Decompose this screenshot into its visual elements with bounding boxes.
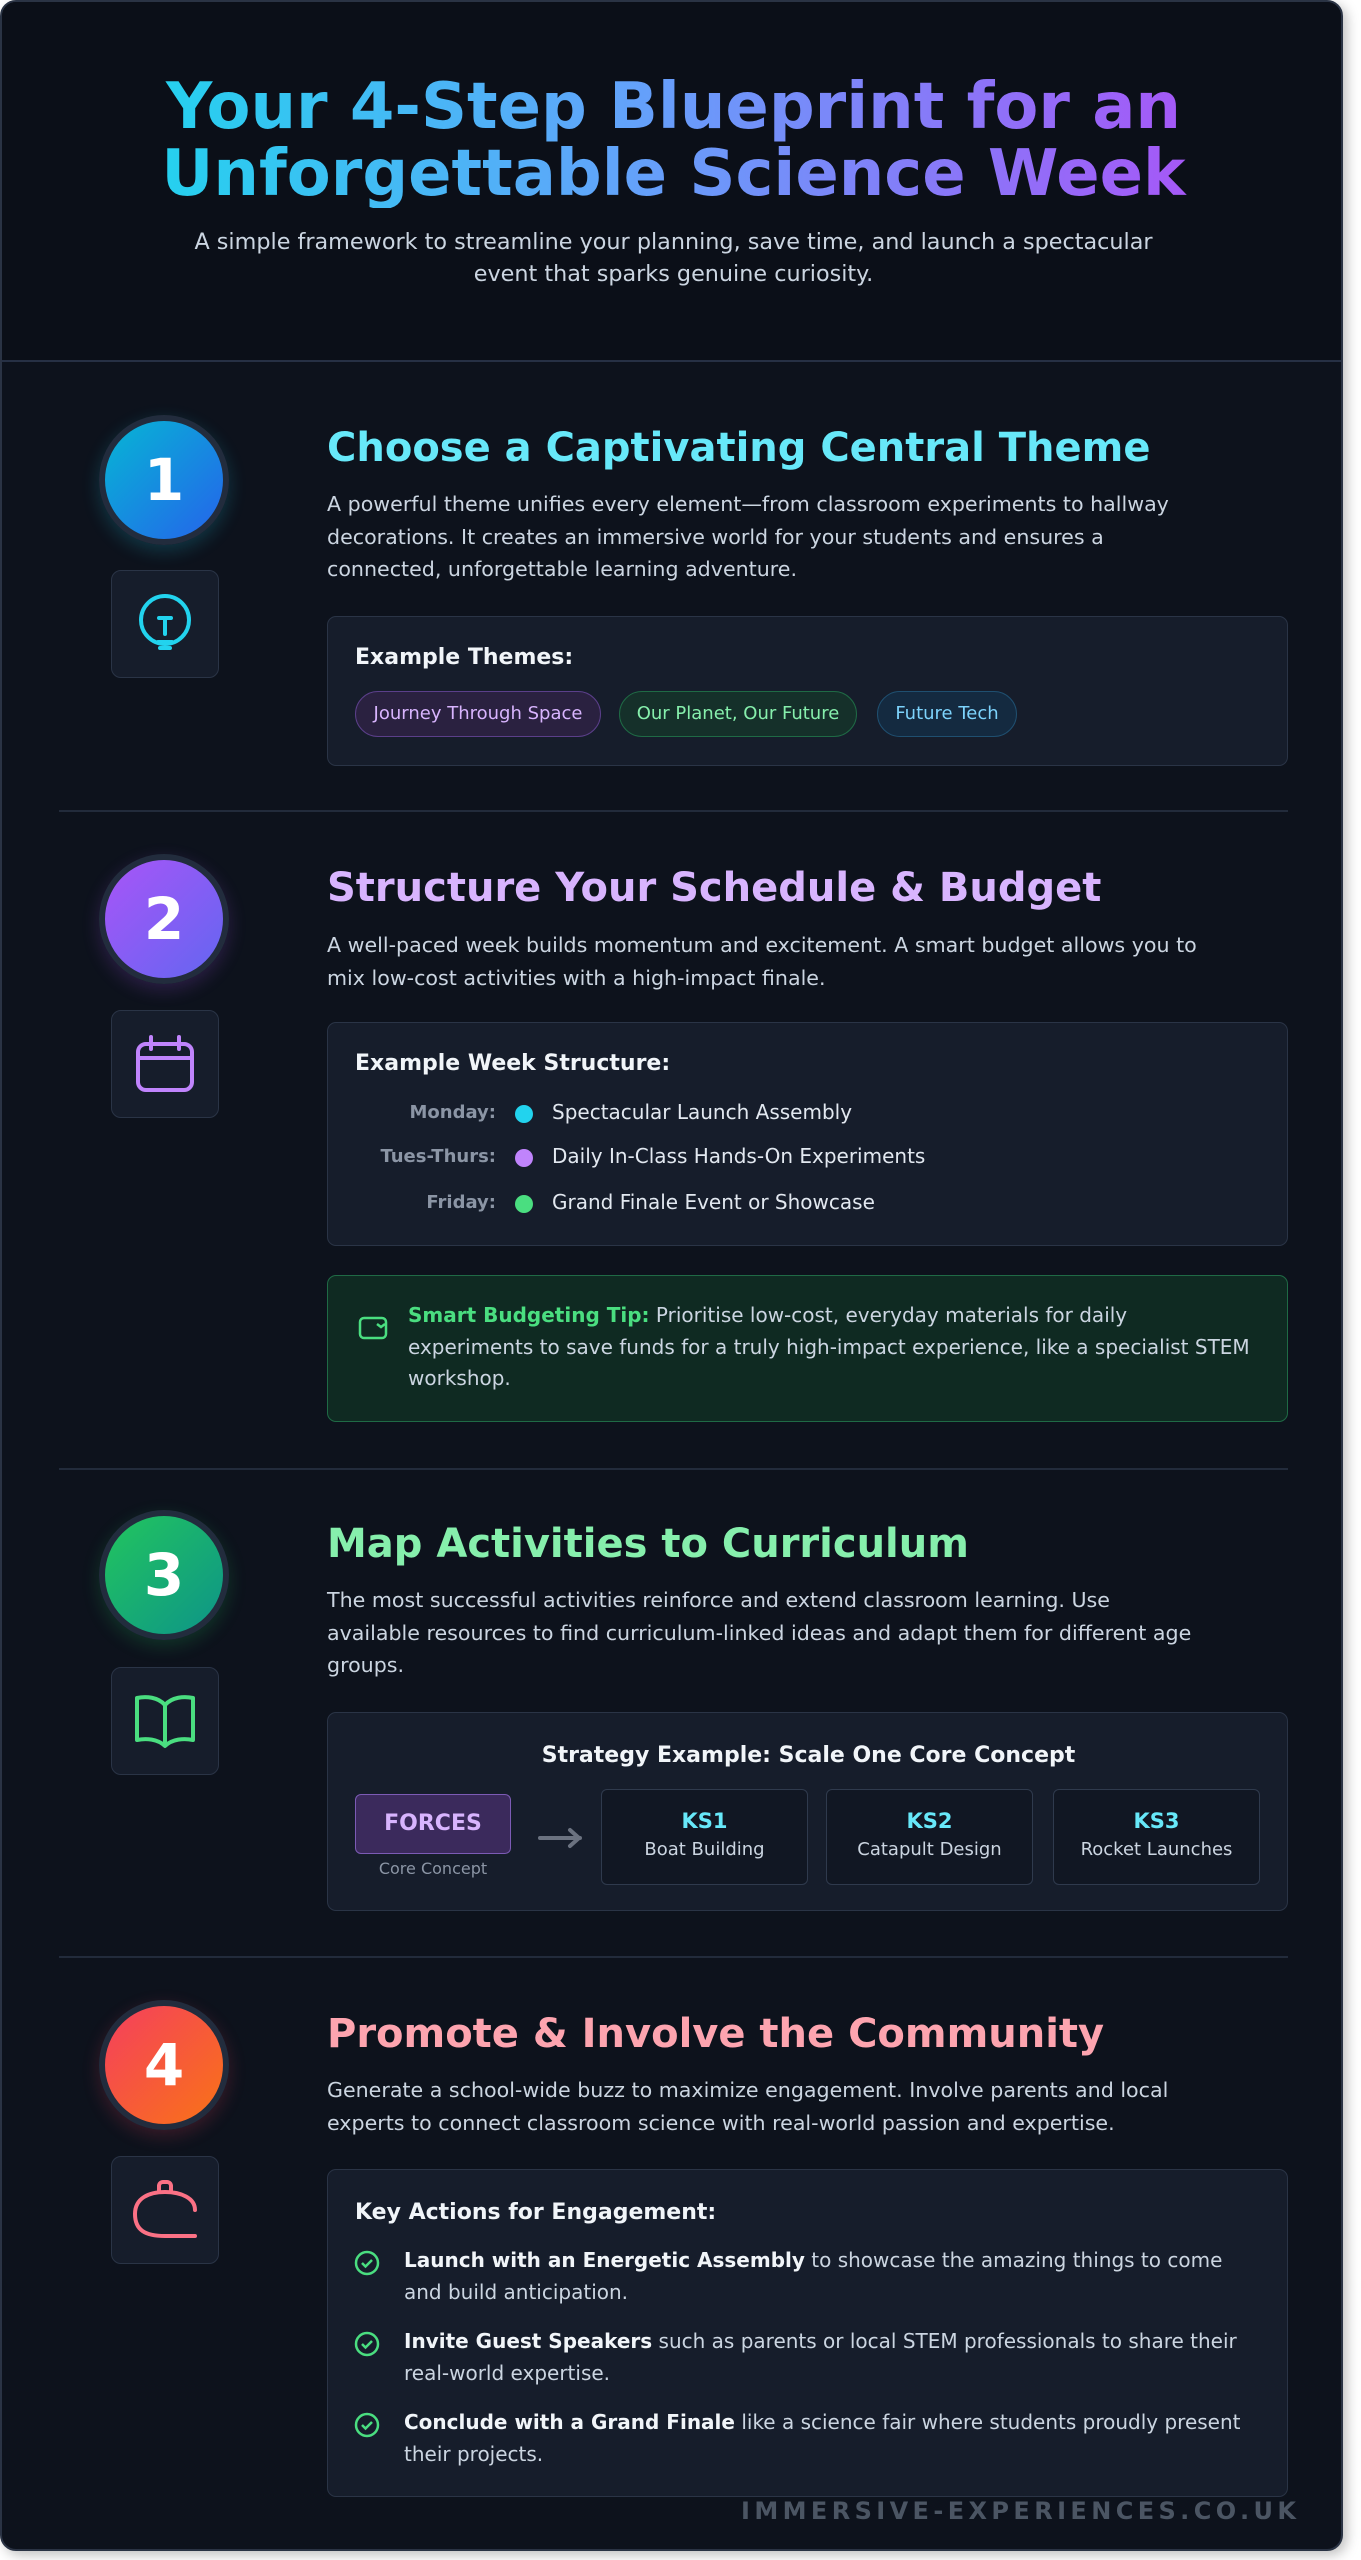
title (2, 74, 1345, 208)
KS2 (826, 1789, 1033, 1885)
step 1 number: 1 (144, 446, 184, 514)
heading 1: Choose a Captivating Central Theme (327, 425, 1150, 471)
icon: book (111, 1667, 219, 1775)
row tues-thurs: Tues-Thurs: (380, 1146, 496, 1167)
action 3: Conclude with a Grand Finale like a science fair where students proudly present their projects. (404, 2410, 1241, 2466)
row monday (409, 1100, 852, 1124)
core concept: forces (355, 1794, 511, 1854)
step 2 number: 2 (144, 885, 184, 953)
step 2 number (99, 854, 229, 984)
pill: space (355, 691, 601, 737)
text 2: A well-paced week builds momentum and excitement. A smart budget allows you to mix low-cost activities with a high-impact finale. (327, 933, 1197, 990)
KS2: Catapult Design (857, 1839, 1002, 1860)
icon: bag (111, 2156, 219, 2264)
KS2: KS2 (906, 1809, 952, 1833)
callout: budgeting tip: Smart Budgeting Tip: Prioritise low-cost, everyday materials for daily experiments to save funds for a truly high-impact experience, like a specialist STEM workshop. (408, 1303, 1250, 1390)
panel: example themes: Example Themes: (355, 645, 573, 670)
heading 4: Promote & Involve the Community (327, 2011, 1104, 2057)
heading 2: Structure Your Schedule & Budget (327, 865, 1101, 911)
step 4 number: 4 (144, 2031, 184, 2099)
row friday: Friday: (426, 1192, 496, 1213)
step 3 number (99, 1510, 229, 1640)
subtitle: A simple framework to streamline your planning, save time, and launch a spectacular (194, 229, 1153, 255)
panel: key actions: Key Actions for Engagement: (355, 2200, 716, 2225)
heading 3: Map Activities to Curriculum (327, 1521, 969, 1567)
icon: lightbulb (111, 570, 219, 678)
step 1 number (99, 415, 229, 545)
panel: example themes (327, 616, 1288, 766)
panel: strategy example: Strategy Example: Scale One Core Concept (542, 1743, 1075, 1768)
panel: strategy example (327, 1712, 1288, 1911)
title: Your 4-Step Blueprint for an (166, 70, 1181, 144)
icon: wallet (358, 1316, 388, 1340)
KS1: KS1 (681, 1809, 728, 1833)
panel: week structure (327, 1022, 1288, 1246)
pill: planet: Our Planet, Our Future (637, 703, 839, 724)
text 3 (326, 1588, 1191, 1677)
KS1 (601, 1789, 808, 1885)
row tues-thurs: Daily In-Class Hands-On Experiments (552, 1144, 925, 1168)
callout: budgeting tip (327, 1275, 1288, 1422)
panel: key actions (327, 2169, 1288, 2497)
panel: week structure: Example Week Structure: (355, 1051, 670, 1076)
subtitle: event that sparks genuine curiosity. (474, 261, 873, 287)
KS3 (1053, 1789, 1260, 1885)
row monday: Monday: (409, 1102, 496, 1123)
text 3: The most successful activities reinforce and extend classroom learning. Use (327, 1588, 1110, 1612)
core concept: forces: FORCES (384, 1811, 482, 1836)
KS3: Rocket Launches (1081, 1839, 1232, 1860)
text 3: available resources to find curriculum-linked ideas and adapt them for different age groups. (327, 1621, 1191, 1677)
text 1: A powerful theme unifies every element—from classroom experiments to hallway decorations. It creates an immersive world for your students and ensures a connected, unforgettable learning adventure. (327, 492, 1169, 581)
text 4: experts to connect classroom science with real-world passion and expertise. (327, 2111, 1115, 2135)
text 4 (327, 2078, 1168, 2135)
row monday: Spectacular Launch Assembly (552, 1100, 852, 1124)
pill: planet (619, 691, 857, 737)
pill: space: Journey Through Space (374, 703, 582, 724)
title: Unforgettable Science Week (161, 137, 1186, 211)
action 1: Launch with an Energetic Assembly to showcase the amazing things to come and build anticipation. (404, 2248, 1222, 2304)
KS3: KS3 (1133, 1809, 1180, 1833)
panel: strategy example: Core Concept (379, 1859, 487, 1878)
icon: calendar (111, 1010, 219, 1118)
step 4 number (99, 2000, 229, 2130)
KS1: Boat Building (644, 1839, 765, 1860)
pill: tech: Future Tech (895, 703, 999, 724)
step 3 number: 3 (144, 1541, 184, 1609)
footer: IMMERSIVE-EXPERIENCES.CO.UK (741, 2497, 1300, 2525)
action 2: Invite Guest Speakers such as parents or local STEM professionals to share their real-world expertise. (404, 2329, 1237, 2385)
row friday: Grand Finale Event or Showcase (552, 1190, 875, 1214)
row tues-thurs (380, 1144, 925, 1168)
pill: tech (877, 691, 1017, 737)
arrow (538, 1828, 582, 1848)
text 4: Generate a school-wide buzz to maximize engagement. Involve parents and local (327, 2078, 1168, 2102)
subtitle (194, 229, 1153, 287)
